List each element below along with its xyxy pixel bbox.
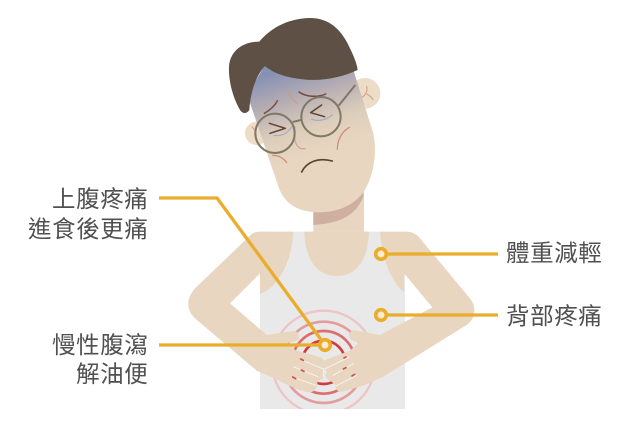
eye: right: [311, 105, 332, 120]
mouth: [302, 160, 332, 172]
label: weight loss: 體重減輕: [506, 240, 602, 266]
label: upper abdominal pain: [28, 186, 148, 242]
marker: weight loss: [376, 249, 386, 259]
label: back pain: 背部疼痛: [506, 303, 602, 329]
illustration: head: [229, 18, 380, 237]
leader lines: [159, 198, 498, 345]
marker: upper abdomen: [320, 340, 330, 350]
wrinkles and brows: [264, 91, 349, 163]
label: chronic diarrhea: [52, 332, 148, 387]
label: chronic diarrhea: 慢性腹瀉: [52, 332, 148, 358]
tank top: [260, 232, 405, 409]
scoop neckline: [304, 232, 369, 276]
label: upper abdominal pain: 進食後更痛: [28, 216, 148, 242]
illustration: torso: [188, 232, 474, 414]
hands: red marks: [293, 357, 355, 379]
left arm and hand: [188, 232, 326, 392]
right arm and hand: [324, 232, 474, 392]
label: chronic diarrhea: 解油便: [76, 361, 148, 387]
label: upper abdominal pain: 上腹疼痛: [52, 186, 148, 212]
neck: [313, 183, 364, 237]
ear: right: [350, 78, 380, 109]
pain rings: [272, 311, 375, 414]
marker: back pain: [376, 310, 386, 320]
ear: left: [245, 122, 268, 145]
glasses: [255, 85, 355, 153]
face: [247, 65, 375, 212]
hands: finger gaps: [294, 357, 357, 386]
hair: [229, 18, 358, 113]
neck shadow: [313, 191, 363, 225]
eye: left: [269, 123, 292, 136]
